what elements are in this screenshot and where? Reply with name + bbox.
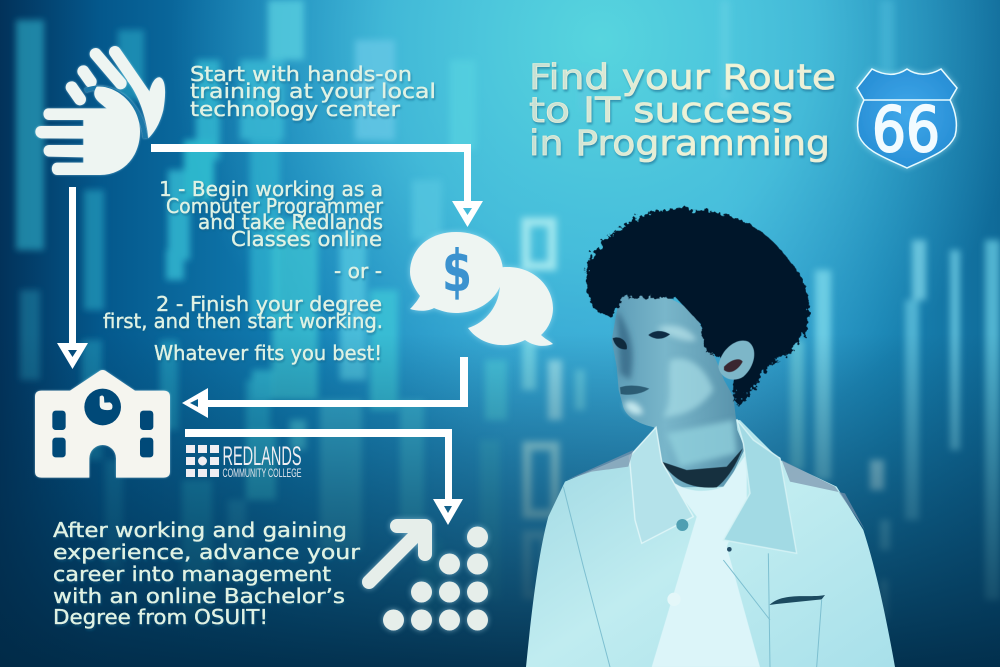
text: advance your career: career into management bbox=[53, 562, 331, 586]
dark shirt neckline bbox=[662, 448, 743, 488]
text: start with hands-on training: training at your local bbox=[190, 79, 436, 103]
text: advance your career bbox=[53, 518, 361, 629]
text: advance your career: experience, advance your bbox=[53, 540, 361, 564]
text: working options: and take Redlands bbox=[198, 210, 383, 234]
arrow: hands to speech bubbles bbox=[151, 144, 483, 227]
title: Find your Route bbox=[529, 58, 836, 98]
text: working options: first, and then start working. bbox=[103, 309, 383, 333]
icon: route 66 shield: 66 bbox=[872, 93, 940, 166]
icon: route 66 shield bbox=[857, 69, 957, 168]
jacket bbox=[526, 420, 895, 667]
jacket left collar bbox=[629, 427, 693, 543]
front bubble bbox=[410, 232, 503, 313]
back bubble bbox=[468, 267, 553, 346]
text: working options: Whatever fits you best! bbox=[154, 341, 382, 365]
buttons and pocket bbox=[563, 487, 825, 667]
shoulder shadows bbox=[567, 450, 865, 530]
arrow: hands to school bbox=[57, 187, 88, 369]
face shading bbox=[617, 310, 737, 467]
logo: Redlands Community College: COMMUNITY COLLEGE bbox=[222, 466, 302, 480]
text: working options: - or - bbox=[334, 259, 382, 283]
icon: school building with clock bbox=[35, 370, 170, 478]
title: to IT success bbox=[529, 91, 793, 131]
arrow: school to growth bbox=[185, 429, 463, 525]
dollar sign: $ bbox=[442, 237, 472, 305]
logo: Redlands Community College bbox=[186, 441, 302, 480]
text: working options: 2 - Finish your degree bbox=[156, 292, 382, 316]
ear bbox=[718, 341, 754, 380]
t-shirt bbox=[652, 453, 760, 667]
text: working options: Computer Programmer bbox=[166, 194, 384, 218]
text: start with hands-on training: Start with hands-on bbox=[190, 62, 412, 86]
text: start with hands-on training: technology center bbox=[190, 97, 401, 121]
text: working options bbox=[103, 177, 384, 365]
hair bbox=[586, 208, 809, 405]
icon: speech bubbles with dollar sign bbox=[410, 232, 553, 346]
icon: growth arrow and dots bbox=[369, 526, 488, 630]
text: working options: 1 - Begin working as a bbox=[159, 177, 383, 201]
logo: Redlands Community College: REDLANDS bbox=[222, 441, 302, 471]
title: in Programming bbox=[529, 124, 830, 164]
facial features bbox=[613, 331, 670, 395]
arrow: bubbles to school bbox=[182, 357, 468, 418]
text: advance your career: Degree from OSUIT! bbox=[53, 605, 268, 629]
title bbox=[529, 58, 836, 164]
jacket right collar bbox=[723, 419, 797, 553]
text: working options: Classes online bbox=[231, 227, 382, 251]
text: start with hands-on training bbox=[190, 62, 436, 121]
text: advance your career: After working and gaining bbox=[53, 518, 347, 542]
icon: clapping hands bbox=[35, 52, 165, 175]
neck and face bbox=[612, 293, 745, 487]
person: young coder with curly hair bbox=[526, 208, 895, 667]
text: advance your career: with an online Bachelor’s bbox=[53, 584, 345, 608]
